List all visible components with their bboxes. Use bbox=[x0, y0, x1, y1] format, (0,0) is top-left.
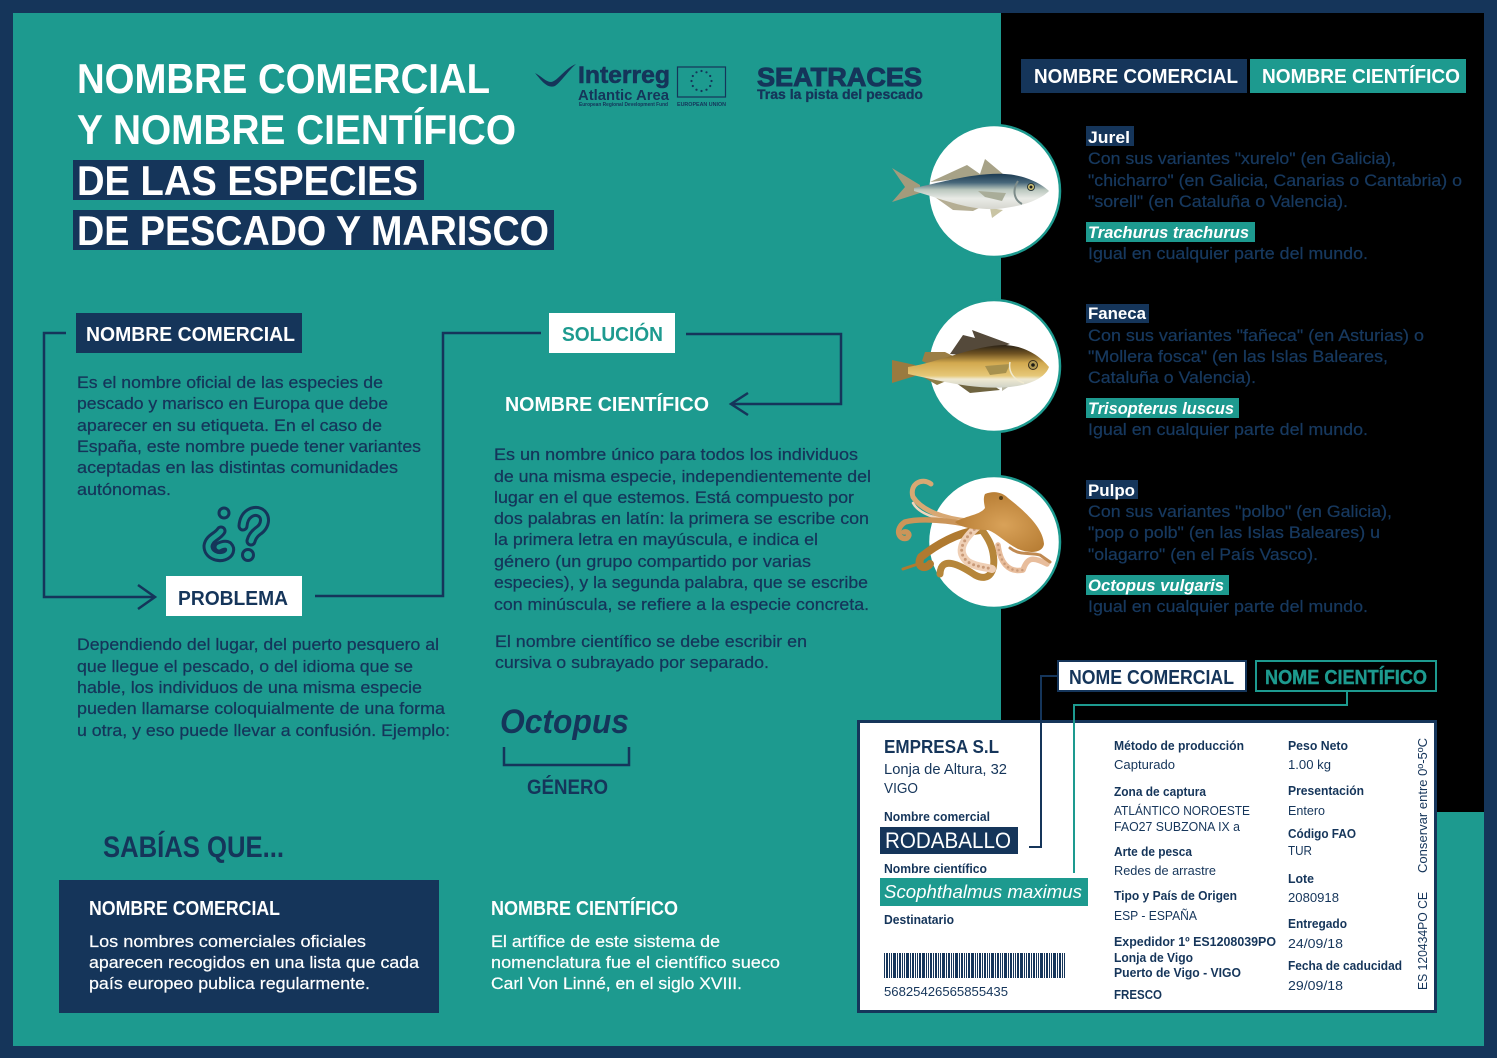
tag: nome comercial: NOME COMERCIAL bbox=[1069, 667, 1234, 689]
label: production column: Método de producción bbox=[1114, 739, 1244, 753]
example: Octopus genero: GÉNERO bbox=[527, 776, 608, 799]
species: pulpo: Con sus variantes "polbo" (en Galicia), bbox=[1088, 502, 1392, 521]
label: vertical text: Conservar entre 0º-5ºC bbox=[1416, 738, 1430, 873]
label: product column: Entero bbox=[1288, 804, 1325, 818]
label: production column: FAO27 SUBZONA IX a bbox=[1114, 820, 1240, 834]
label: production column: Capturado bbox=[1114, 758, 1175, 772]
heading: problema: PROBLEMA bbox=[178, 588, 288, 610]
label: product column: Entregado bbox=[1288, 917, 1347, 931]
text: nombre cientifico definition: El nombre científico se debe escribir en bbox=[495, 632, 807, 651]
icon: question marks bbox=[208, 508, 265, 560]
connector: comercial to problema bbox=[44, 333, 155, 609]
label: nombre comercial: RODABALLO bbox=[885, 828, 1011, 853]
species: pulpo: Igual en cualquier parte del mundo. bbox=[1088, 597, 1368, 616]
species: pulpo: "pop o polb" (en las Islas Baleares) u bbox=[1088, 523, 1380, 542]
text: problema: Dependiendo del lugar, del puerto pesquero al bbox=[77, 635, 439, 654]
text: nombre comercial definition: pescado y marisco en Europa que debe bbox=[77, 394, 388, 413]
species: jurel bbox=[1086, 126, 1462, 263]
text: nombre cientifico definition bbox=[494, 445, 871, 672]
label: product column: 2080918 bbox=[1288, 891, 1339, 905]
black species panel bbox=[1001, 13, 1484, 812]
label: nombre cientifico: Scophthalmus maximus bbox=[884, 881, 1082, 902]
panel: sabias que nombre comercial: país europeo publica regularmente. bbox=[89, 974, 370, 993]
label: nombre comercial bbox=[880, 810, 1018, 854]
label: production column: Redes de arrastre bbox=[1114, 864, 1216, 878]
label: production column: ESP - ESPAÑA bbox=[1114, 909, 1198, 923]
species: faneca: Faneca bbox=[1088, 304, 1147, 323]
species: pulpo: Octopus vulgaris bbox=[1088, 576, 1224, 595]
label: production column: Puerto de Vigo - VIGO bbox=[1114, 966, 1241, 980]
logo: European Union flag: EUROPEAN UNION bbox=[677, 102, 726, 108]
text: nombre comercial definition: aparecer en su etiqueta. En el caso de bbox=[77, 416, 382, 435]
label: product column bbox=[1288, 739, 1402, 993]
illustration: jurel bbox=[892, 125, 1060, 257]
label: product column: 1.00 kg bbox=[1288, 758, 1331, 772]
logo: Interreg Atlantic Area: European Regional Development Fund bbox=[579, 102, 668, 108]
title: DE PESCADO Y MARISCO bbox=[77, 207, 549, 254]
species: jurel: Con sus variantes "xurelo" (en Galicia), bbox=[1088, 149, 1396, 168]
label: company: EMPRESA S.L bbox=[884, 737, 999, 757]
species: faneca: "Mollera fosca" (en las Islas Baleares, bbox=[1088, 347, 1388, 366]
heading: solucion: SOLUCIÓN bbox=[562, 322, 663, 346]
logo: Interreg Atlantic Area: Interreg bbox=[578, 62, 670, 89]
text: nombre comercial definition: Es el nombre oficial de las especies de bbox=[77, 373, 383, 392]
label panel: fish label bbox=[858, 722, 1436, 1012]
panel: sabias que nombre cientifico: El artífice de este sistema de bbox=[491, 932, 720, 951]
label: production column: Lonja de Vigo bbox=[1114, 951, 1193, 965]
text: nombre cientifico definition: género (un grupo compartido por varias bbox=[494, 552, 811, 571]
illustration: faneca bbox=[892, 300, 1060, 432]
heading: nombre comercial: NOMBRE COMERCIAL bbox=[86, 324, 295, 346]
label: vertical text: ES 120434PO CE bbox=[1416, 892, 1430, 990]
heading: sabias que: SABÍAS QUE... bbox=[103, 830, 284, 864]
label: barcode: 56825426565855435 bbox=[884, 984, 1008, 999]
text: nombre comercial definition: aceptadas en las distintas comunidades bbox=[77, 458, 398, 477]
species: jurel: "chicharro" (en Galicia, Canarias o Cantabria) o bbox=[1088, 171, 1462, 190]
label: production column: Expedidor 1º ES1208039PO bbox=[1114, 935, 1276, 949]
octopus arms bbox=[899, 481, 1050, 577]
legend: nombre cientifico: NOMBRE CIENTÍFICO bbox=[1262, 65, 1460, 88]
label: production column: Zona de captura bbox=[1114, 785, 1207, 799]
text: problema: hable, los individuos de una misma especie bbox=[77, 678, 422, 697]
text: nombre cientifico definition: Es un nombre único para todos los individuos bbox=[494, 445, 858, 464]
text: nombre cientifico definition: cursiva o subrayado por separado. bbox=[495, 653, 769, 672]
species: pulpo: Pulpo bbox=[1088, 481, 1135, 500]
panel: sabias que nombre comercial: NOMBRE COMERCIAL bbox=[89, 898, 280, 920]
title: Y NOMBRE CIENTÍFICO bbox=[77, 106, 516, 153]
text: problema bbox=[77, 635, 450, 740]
text: nombre cientifico definition: especies), y la segunda palabra, que se escribe bbox=[494, 573, 868, 592]
tag: nome comercial bbox=[1058, 661, 1246, 691]
label: company bbox=[884, 737, 1007, 797]
species: faneca: Trisopterus luscus bbox=[1088, 399, 1234, 418]
label: production column: ATLÁNTICO NOROESTE bbox=[1114, 803, 1250, 818]
tag: nome cientifico bbox=[1256, 661, 1436, 691]
label: nombre cientifico bbox=[880, 862, 1088, 906]
label: company: VIGO bbox=[884, 781, 918, 797]
label: product column: Presentación bbox=[1288, 784, 1364, 798]
label: production column: FRESCO bbox=[1114, 988, 1162, 1002]
logo: Interreg Atlantic Area: Atlantic Area bbox=[578, 87, 670, 104]
connector: nome cientifico to species name bbox=[1074, 692, 1347, 873]
label: product column: 29/09/18 bbox=[1288, 979, 1343, 993]
panel: sabias que nombre cientifico: NOMBRE CIENTÍFICO bbox=[491, 897, 678, 920]
text: nombre cientifico definition: de una misma especie, independientemente del bbox=[494, 467, 871, 486]
label: company: Lonja de Altura, 32 bbox=[884, 762, 1007, 778]
panel: sabias que nombre comercial bbox=[59, 880, 439, 1013]
illustration: pulpo bbox=[899, 476, 1060, 608]
logo: Seatraces: SEATRACES bbox=[757, 62, 922, 92]
species: pulpo: "olagarro" (en el País Vasco). bbox=[1088, 545, 1318, 564]
heading: nombre comercial bbox=[76, 313, 302, 353]
label: product column: Fecha de caducidad bbox=[1288, 959, 1402, 973]
label: nombre comercial: Nombre comercial bbox=[884, 810, 990, 824]
species: faneca bbox=[1086, 304, 1424, 439]
text: nombre comercial definition: autónomas. bbox=[77, 480, 171, 499]
connector: problema to solucion bbox=[315, 333, 541, 596]
panel: sabias que nombre cientifico bbox=[491, 897, 780, 993]
connector: solucion to nombre cientifico bbox=[686, 334, 841, 415]
label: production column bbox=[1114, 739, 1276, 1002]
example: Octopus genero: Octopus bbox=[500, 703, 629, 741]
species: jurel: Trachurus trachurus bbox=[1088, 223, 1249, 242]
species: faneca: Igual en cualquier parte del mundo. bbox=[1088, 420, 1368, 439]
text: problema: que llegue el pescado, o del idioma que se bbox=[77, 657, 413, 676]
label: production column: Arte de pesca bbox=[1114, 845, 1193, 859]
legend: nombre comercial: NOMBRE COMERCIAL bbox=[1034, 66, 1238, 88]
species: jurel: Igual en cualquier parte del mundo. bbox=[1088, 244, 1368, 263]
label: destinatario: Destinatario bbox=[884, 913, 954, 927]
text: nombre comercial definition: España, este nombre puede tener variantes bbox=[77, 437, 421, 456]
text: nombre cientifico definition: dos palabras en latín: la primera se escribe con bbox=[494, 509, 869, 528]
octopus mantle bbox=[955, 492, 1044, 552]
species: pulpo bbox=[1086, 480, 1392, 616]
panel: sabias que nombre cientifico: nomenclatura fue el científico sueco bbox=[491, 953, 780, 972]
title bbox=[73, 55, 554, 254]
heading: problema bbox=[166, 576, 302, 616]
text: nombre cientifico definition: la primera letra en mayúscula, e indica el bbox=[494, 530, 818, 549]
text: problema: pueden llamarse coloquialmente de una forma bbox=[77, 699, 446, 718]
tag: nome cientifico: NOME CIENTÍFICO bbox=[1265, 666, 1427, 689]
species: jurel: "sorell" (en Cataluña o Valencia). bbox=[1088, 192, 1348, 211]
species: jurel: Jurel bbox=[1088, 128, 1130, 147]
label: product column: Peso Neto bbox=[1288, 739, 1348, 753]
label: production column: Tipo y País de Origen bbox=[1114, 889, 1237, 903]
heading: solucion bbox=[549, 313, 675, 353]
legend: nombre cientifico bbox=[1250, 59, 1466, 93]
label: product column: 24/09/18 bbox=[1288, 937, 1343, 951]
label: product column: TUR bbox=[1288, 844, 1312, 858]
logo: European Union flag bbox=[677, 67, 726, 108]
logo: Interreg Atlantic Area bbox=[535, 62, 670, 108]
legend: nombre comercial bbox=[1021, 59, 1247, 93]
species: faneca: Con sus variantes "fañeca" (en Asturias) o bbox=[1088, 326, 1424, 345]
label: vertical text bbox=[1416, 738, 1430, 990]
text: nombre comercial definition bbox=[77, 373, 421, 499]
panel: sabias que nombre comercial: Los nombres comerciales oficiales bbox=[89, 932, 366, 951]
heading: nombre cientifico: NOMBRE CIENTÍFICO bbox=[505, 393, 709, 416]
example: Octopus genero bbox=[500, 703, 629, 799]
label: nombre cientifico: Nombre científico bbox=[884, 862, 987, 876]
title: DE LAS ESPECIES bbox=[77, 157, 418, 204]
text: problema: u otra, y eso puede llevar a confusión. Ejemplo: bbox=[77, 721, 450, 740]
logo: Seatraces: Tras la pista del pescado bbox=[757, 86, 923, 102]
label: product column: Lote bbox=[1288, 872, 1314, 886]
label: product column: Código FAO bbox=[1288, 827, 1356, 841]
species: faneca: Cataluña o Valencia). bbox=[1088, 368, 1256, 387]
panel: sabias que nombre comercial: aparecen recogidos en una lista que cada bbox=[89, 953, 420, 972]
text: nombre cientifico definition: lugar en el que estemos. Está compuesto por bbox=[494, 488, 854, 507]
panel: sabias que nombre cientifico: Carl Von Linné, en el siglo XVIII. bbox=[491, 974, 742, 993]
title: NOMBRE COMERCIAL bbox=[77, 55, 490, 102]
text: nombre cientifico definition: con minúscula, se refiere a la especie concreta. bbox=[494, 595, 869, 614]
connector: nome comercial to rodaballo bbox=[1029, 676, 1057, 847]
